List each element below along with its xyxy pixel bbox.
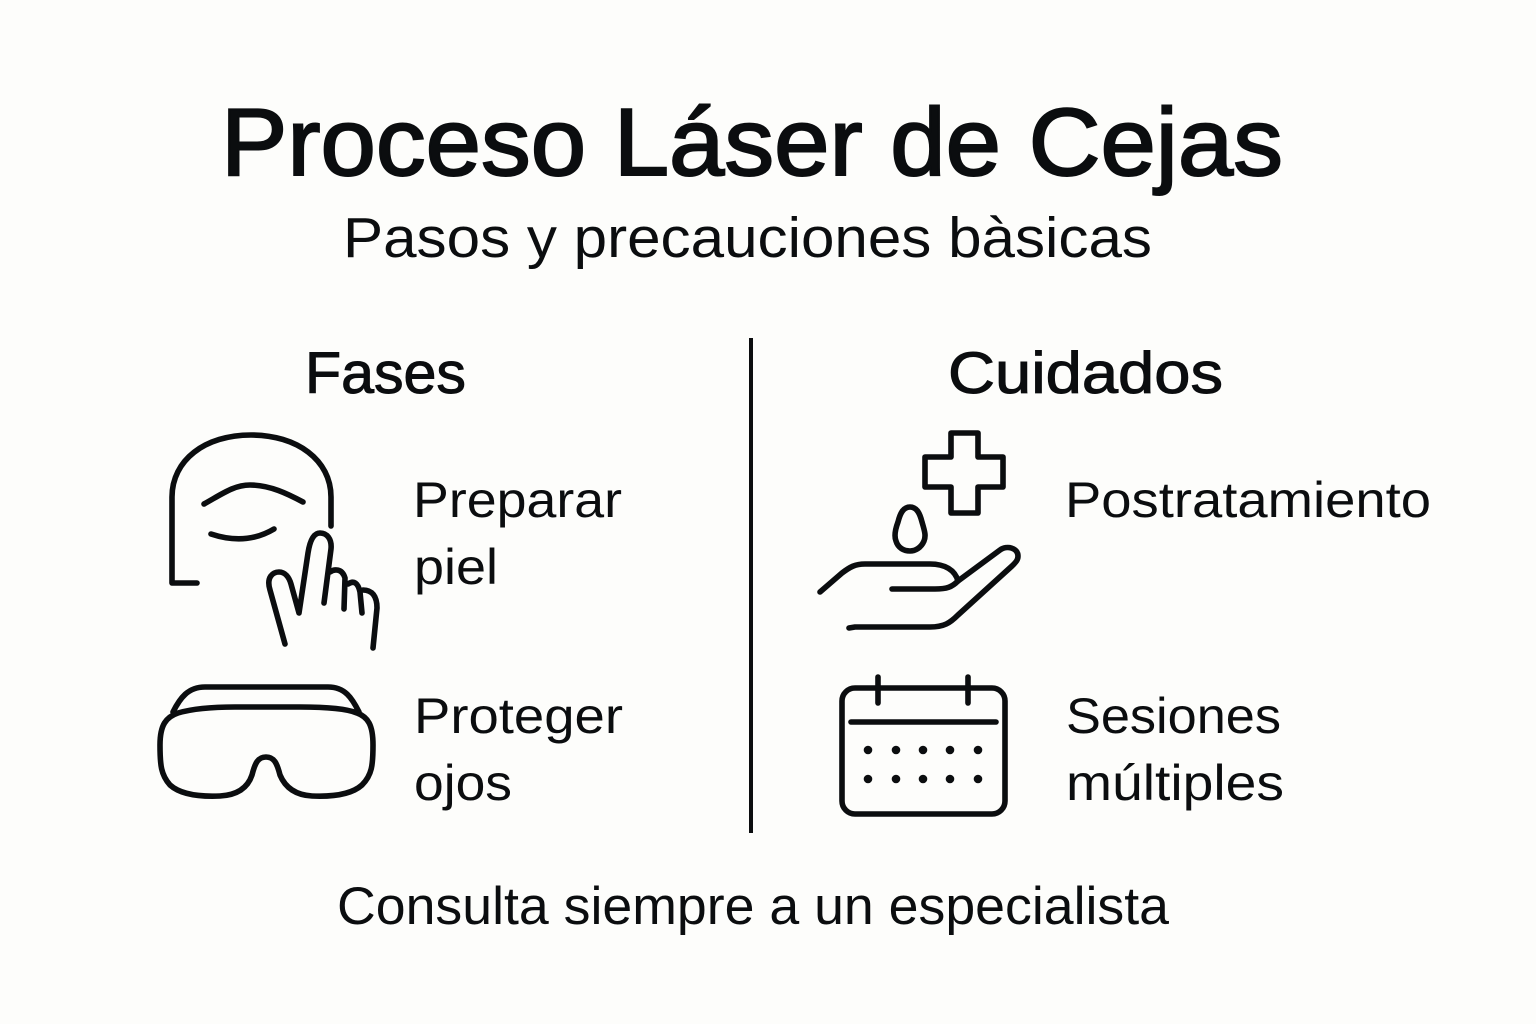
footer note: Consulta siempre a un especialista bbox=[337, 877, 1170, 936]
text: proteger: Proteger bbox=[414, 688, 623, 744]
icon: calendar bbox=[842, 677, 1005, 814]
icon: protective goggles bbox=[160, 687, 373, 796]
title: Proceso Láser de Cejas bbox=[221, 89, 1283, 196]
panel: cuidados bbox=[820, 341, 1431, 814]
text: preparar: Preparar bbox=[413, 472, 622, 528]
heading: fases: Fases bbox=[305, 341, 466, 406]
text: sesiones: Sesiones bbox=[1066, 688, 1281, 744]
text: ojos: ojos bbox=[414, 755, 512, 811]
text: múltiples: múltiples bbox=[1066, 755, 1284, 811]
panel: fases bbox=[160, 341, 623, 811]
icon: face with eyebrow and pointing hand bbox=[172, 435, 377, 648]
icon: hand with drop and cross bbox=[820, 433, 1018, 628]
text: piel: piel bbox=[414, 539, 498, 595]
text: postratamiento: Postratamiento bbox=[1065, 472, 1431, 528]
vertical divider bbox=[749, 338, 753, 833]
subtitle: Pasos y precauciones bàsicas bbox=[343, 206, 1152, 270]
heading: cuidados: Cuidados bbox=[948, 341, 1223, 406]
